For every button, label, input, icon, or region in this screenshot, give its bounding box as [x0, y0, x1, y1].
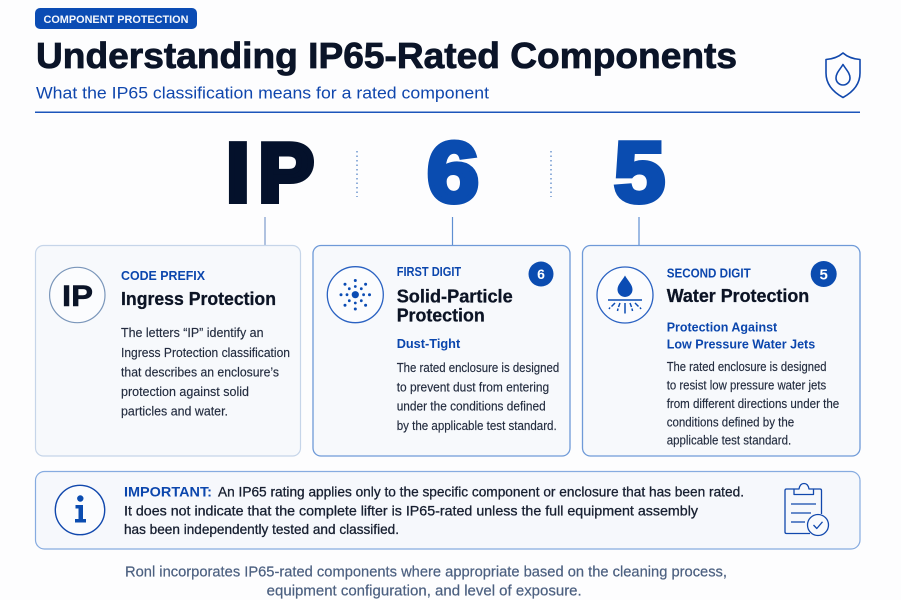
- digit badge: 5: [820, 266, 828, 284]
- rating code: IP 6 5: [226, 126, 665, 245]
- body text: to resist low pressure water jets: [667, 378, 827, 393]
- header: [35, 8, 860, 102]
- title: Understanding IP65-Rated Components: [36, 35, 737, 76]
- digit badge: [811, 261, 837, 287]
- body text: protection against solid: [121, 384, 249, 399]
- eyebrow: SECOND DIGIT: [667, 267, 751, 281]
- body text: applicable test standard.: [667, 433, 791, 448]
- body text: [397, 360, 559, 433]
- sub-heading: [667, 320, 815, 352]
- panel heading: [397, 286, 513, 326]
- panel heading: Ingress Protection: [121, 288, 276, 309]
- subtitle: What the IP65 classification means for a rated component: [36, 84, 489, 102]
- icon: IP circle: IP: [62, 280, 93, 313]
- body text: particles and water.: [121, 404, 228, 418]
- category pill: COMPONENT PROTECTION: [44, 14, 189, 26]
- big digit 5: 5: [614, 126, 665, 220]
- body text: by the applicable test standard.: [397, 418, 557, 433]
- icon: information: [55, 485, 105, 535]
- note text: It does not indicate that the complete lifter is IP65-rated unless the full equipment assembly: [124, 503, 698, 519]
- panel: first digit: [313, 246, 570, 456]
- body text: [667, 359, 839, 448]
- body text: under the conditions defined: [397, 398, 546, 414]
- icon: water drop and jets: [597, 267, 653, 323]
- body text: Ingress Protection classification: [121, 345, 290, 360]
- note text: An IP65 rating applies only to the specific component or enclosure that has been rated.: [218, 484, 744, 500]
- panel heading: Solid-Particle: [397, 286, 513, 307]
- body text: conditions defined by the: [667, 414, 794, 429]
- body text: from different directions under the: [667, 396, 839, 411]
- category pill: [35, 8, 197, 29]
- digit badge: 6: [537, 266, 545, 282]
- note text: IMPORTANT:: [124, 484, 212, 500]
- big letters IP: I: [226, 126, 249, 219]
- sub-heading: Protection Against: [667, 320, 778, 335]
- body text: The letters “IP” identify an: [121, 325, 264, 340]
- eyebrow: FIRST DIGIT: [397, 265, 462, 279]
- panel heading: Protection: [397, 305, 485, 326]
- callout: important note: [36, 472, 860, 549]
- note text: [124, 484, 744, 537]
- sub-heading: Low Pressure Water Jets: [667, 337, 815, 352]
- body text: The rated enclosure is designed: [667, 359, 826, 374]
- icon: shield with water drop: [826, 53, 860, 98]
- eyebrow: CODE PREFIX: [121, 269, 206, 283]
- icon: dust particles: [327, 267, 383, 323]
- icon: clipboard with check: [785, 484, 828, 536]
- note text: has been independently tested and classified.: [124, 521, 399, 537]
- panel heading: Water Protection: [667, 285, 809, 306]
- footer note: equipment configuration, and level of exposure.: [267, 584, 582, 600]
- sub-heading: Dust-Tight: [397, 336, 461, 351]
- panel: second digit: [582, 246, 860, 456]
- footer note: Ronl incorporates IP65-rated components where appropriate based on the cleaning process,: [125, 565, 727, 581]
- panel: code prefix: [36, 246, 300, 456]
- footer note: [125, 565, 727, 600]
- big letters IP: P: [258, 126, 314, 219]
- digit badge: [528, 262, 554, 286]
- big digit 6: 6: [427, 126, 479, 220]
- body text: [121, 325, 290, 418]
- icon: IP circle: [50, 267, 105, 323]
- body text: that describes an enclosure’s: [121, 364, 279, 380]
- body text: to prevent dust from entering: [397, 380, 549, 395]
- body text: The rated enclosure is designed: [397, 360, 559, 375]
